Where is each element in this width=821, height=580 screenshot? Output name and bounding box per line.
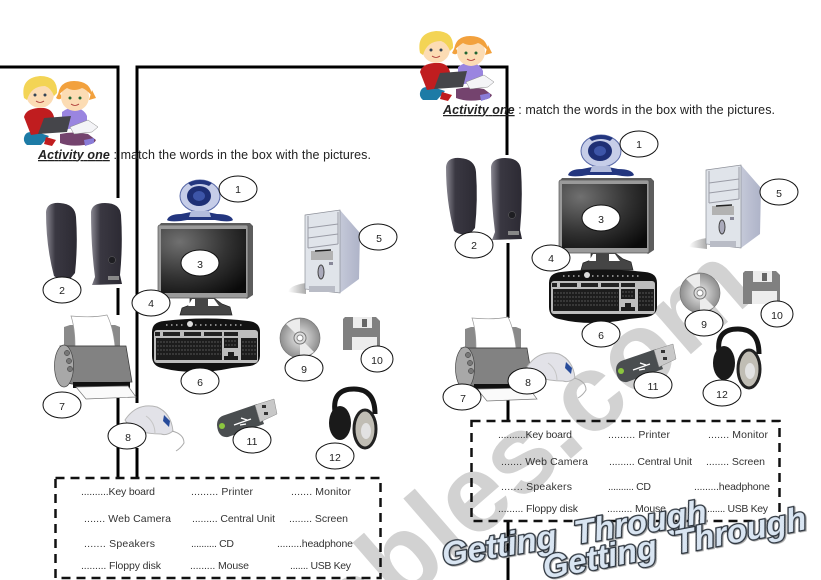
word box: [472, 421, 780, 521]
word box: ....... Monitor: [708, 429, 768, 441]
number labels: 8: [525, 377, 531, 389]
icon: CD: [680, 273, 720, 313]
word box: .......... CD: [608, 481, 651, 493]
number labels: 6: [197, 377, 203, 389]
number labels: 5: [776, 188, 782, 200]
icon: webcam: [167, 180, 233, 221]
word box: ......... Printer: [191, 486, 254, 498]
word box: .........headphone: [277, 538, 353, 550]
number labels: [443, 131, 798, 410]
icon: central unit: [689, 165, 761, 249]
word box: ......... Floppy disk: [81, 560, 162, 572]
icon: headphones: [713, 329, 760, 388]
number labels: 10: [771, 310, 783, 322]
word box: ......... Central Unit: [192, 513, 275, 525]
word box: .......... CD: [191, 538, 234, 550]
word box: .........headphone: [694, 481, 770, 493]
word box: ....... USB Key: [290, 560, 352, 572]
panel: left worksheet: [23, 76, 397, 578]
number labels: 7: [59, 401, 65, 413]
word box: ......... Floppy disk: [498, 503, 579, 515]
icon: speakers: [446, 158, 522, 240]
icon: central unit: [288, 210, 360, 294]
number labels: 1: [235, 184, 241, 196]
icon: mouse: [527, 353, 586, 398]
word box: ..........Key board: [498, 429, 572, 441]
panel: right worksheet: [419, 31, 798, 521]
icon: CD: [280, 318, 320, 358]
icon: monitor: [158, 223, 253, 315]
number labels: 8: [125, 432, 131, 444]
number labels: 4: [148, 298, 154, 310]
word box: ........ Screen: [289, 513, 348, 525]
number labels: 11: [648, 381, 659, 393]
instruction heading: Activity one : match the words in the box with the pictures.: [442, 103, 775, 117]
word box: [56, 478, 380, 578]
number labels: 6: [598, 330, 604, 342]
number labels: 2: [471, 240, 477, 252]
number labels: 12: [329, 452, 341, 464]
number labels: 3: [197, 259, 203, 271]
number labels: 2: [59, 285, 65, 297]
icon: keyboard: [549, 270, 657, 323]
number labels: 3: [598, 214, 604, 226]
word box: ....... Monitor: [291, 486, 352, 498]
word box: ......... Central Unit: [609, 456, 692, 468]
icon: printer: [456, 317, 537, 401]
icon: speakers: [46, 203, 122, 285]
wordart: Getting Through, first copy: Getting Through: [439, 493, 709, 573]
word box: ......... Mouse: [190, 560, 249, 572]
number labels: 9: [301, 364, 307, 376]
word box: ....... Speakers: [501, 481, 572, 493]
word box: ..........Key board: [81, 486, 155, 498]
number labels: 5: [376, 233, 382, 245]
word box: ......... Printer: [608, 429, 670, 441]
word box: ......... Mouse: [607, 503, 666, 515]
icon: keyboard: [152, 318, 260, 372]
number labels: 11: [247, 436, 258, 448]
number labels: 9: [701, 319, 707, 331]
word box: ....... Web Camera: [501, 456, 588, 468]
icon: floppy disk: [343, 317, 380, 350]
icon: printer: [54, 315, 136, 399]
icon: mouse: [125, 406, 184, 451]
frame lines: left and right worksheet borders: [0, 67, 508, 580]
word box: ....... USB Key: [707, 503, 769, 515]
illustration: children with laptop: [419, 31, 494, 101]
word box: ........ Screen: [706, 456, 765, 468]
icon: headphones: [329, 389, 376, 448]
number labels: [43, 176, 397, 469]
word box: ....... Web Camera: [84, 513, 171, 525]
number labels: 10: [371, 355, 383, 367]
icon: USB key: [217, 399, 277, 437]
illustration: children with laptop: [23, 76, 98, 146]
number labels: 7: [460, 393, 466, 405]
icon: webcam: [568, 135, 634, 176]
word box: ....... Speakers: [84, 538, 155, 550]
number labels: 12: [716, 389, 728, 401]
number labels: 4: [548, 253, 554, 265]
icon: USB key: [616, 344, 676, 382]
instruction heading: Activity one : match the words in the box with the pictures.: [37, 148, 371, 162]
number labels: 1: [636, 139, 642, 151]
icon: floppy disk: [743, 271, 780, 304]
icon: monitor: [559, 178, 654, 270]
